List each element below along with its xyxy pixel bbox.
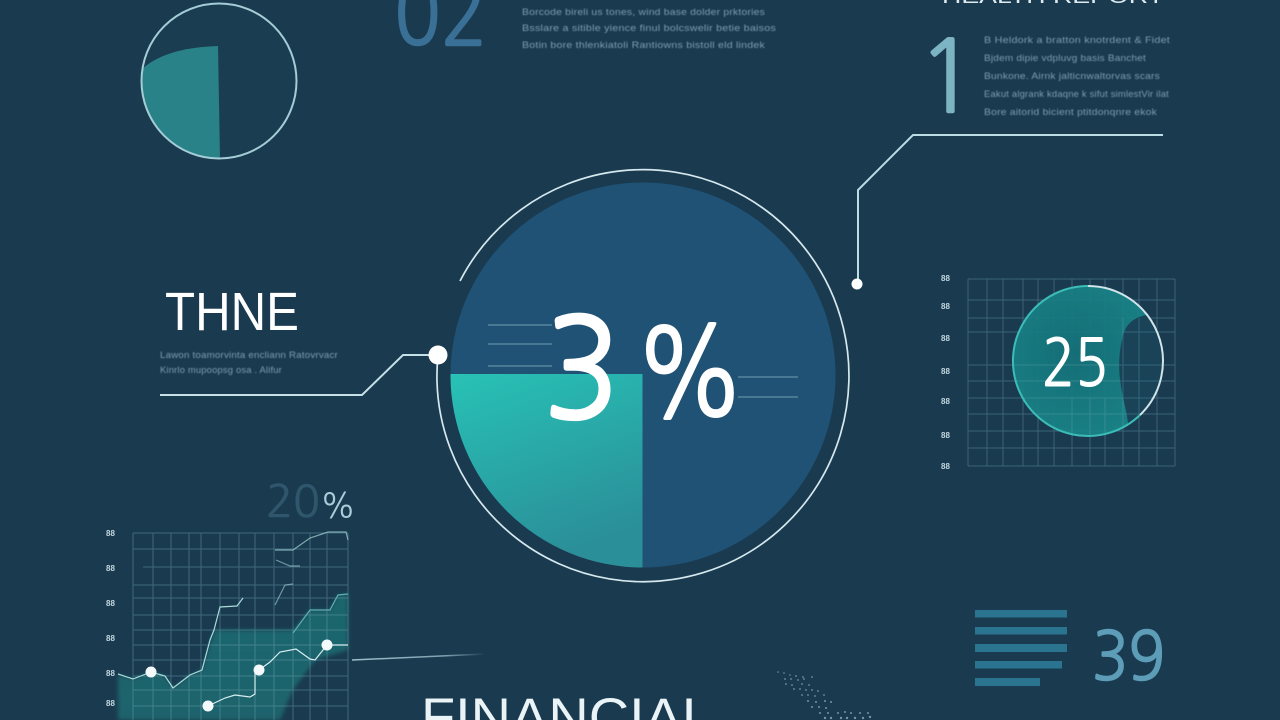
percentage label 20%: % — [320, 489, 356, 523]
axis labels: 88 — [106, 634, 115, 643]
right grid chart — [941, 274, 1175, 471]
speed lines — [488, 325, 798, 397]
section number 39: 39 — [1092, 623, 1165, 690]
top centre text block: Borcode bireli us tones, wind base dolder prktories — [522, 7, 765, 18]
top right text block: Bore aitorid bicient ptitdonqnre ekok — [984, 107, 1157, 118]
top right text block: B Heldork a bratton knotrdent & Fidet — [984, 35, 1170, 46]
circle metric: 25 — [1042, 331, 1108, 396]
trend line extension — [352, 654, 485, 660]
axis labels: 88 — [106, 529, 115, 538]
axis labels — [106, 529, 115, 708]
section number 1: 1 — [917, 27, 978, 127]
top centre text block: Bsslare a sitible yience finul bolcswelir betie baisos — [522, 23, 776, 34]
data points — [146, 640, 332, 712]
axis labels: 88 — [941, 334, 950, 343]
top centre text block — [522, 7, 776, 51]
top right text block: Eakut algrank kdaqne k sifut simlestVir ilat — [984, 89, 1169, 100]
axis labels: 88 — [941, 274, 950, 283]
axis labels — [941, 274, 950, 471]
outer ring — [437, 170, 849, 582]
teal area — [118, 594, 348, 720]
axis labels: 88 — [941, 397, 950, 406]
left text block: Kinrlo mupoopsg osa . Alifur — [160, 365, 282, 376]
axis labels: 88 — [941, 302, 950, 311]
axis labels: 88 — [941, 462, 950, 471]
top-left pie chart — [141, 4, 296, 159]
top right text block — [984, 35, 1170, 118]
axis labels: 88 — [106, 599, 115, 608]
callout connector left — [160, 346, 448, 395]
axis labels: 88 — [106, 699, 115, 708]
teal quarter segment — [450, 374, 642, 568]
value: 3 — [544, 300, 620, 438]
top right text block: Bjdem dipie vdpluvg basis Banchet — [984, 53, 1146, 64]
axis labels: 88 — [106, 564, 115, 573]
circle metric — [1013, 286, 1170, 440]
dotted decoration — [777, 671, 871, 719]
percentage label 20%: 20 — [266, 480, 320, 524]
left text block — [160, 350, 338, 376]
left heading: THNE — [165, 282, 299, 342]
central donut chart — [437, 170, 849, 582]
top right text block: Bunkone. Airnk jalticnwaltorvas scars — [984, 71, 1160, 82]
axis labels: 88 — [941, 431, 950, 440]
percentage label 20% — [266, 480, 356, 524]
callout connector right — [852, 135, 1163, 290]
left text block: Lawon toamorvinta encliann Ratovrvacr — [160, 350, 338, 361]
trend lines — [118, 532, 348, 706]
axis labels: 88 — [941, 367, 950, 376]
top centre text block: Botin bore thlenkiatoli Rantiowns bistoll eld lindek — [522, 40, 765, 51]
line chart bottom left — [106, 529, 348, 720]
axis labels: 88 — [106, 669, 115, 678]
horizontal bars — [975, 610, 1067, 686]
central donut chart: % — [634, 313, 746, 435]
